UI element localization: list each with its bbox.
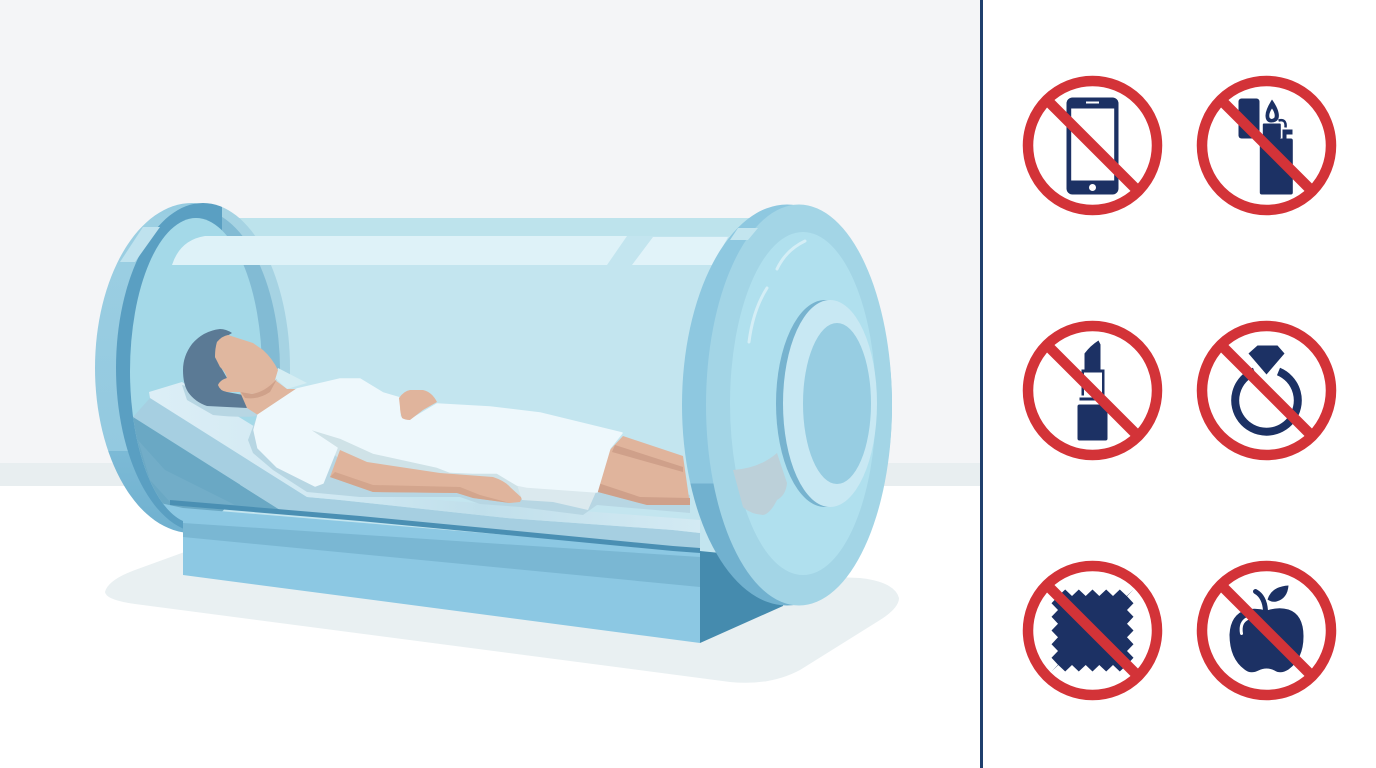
hair — [183, 329, 247, 408]
cap highlight upper — [777, 241, 805, 269]
light strip on left ring — [120, 227, 160, 262]
no sign — [1202, 326, 1331, 455]
divider line — [980, 0, 983, 768]
door shadow — [776, 300, 874, 507]
window highlight right — [632, 237, 728, 265]
prohibited: apple — [1202, 566, 1331, 695]
no sign — [1028, 326, 1157, 455]
gown fold — [307, 428, 522, 498]
base stripe — [183, 523, 700, 587]
rim band reflection — [730, 228, 758, 240]
cap rim — [682, 204, 892, 606]
floor shadow — [105, 550, 899, 683]
phone icon — [1066, 98, 1118, 194]
no sign — [1028, 566, 1157, 695]
wall background — [0, 0, 981, 463]
hyperbaric chamber — [95, 203, 892, 643]
cap face — [706, 204, 892, 606]
gown hem — [517, 485, 596, 510]
no sign — [1202, 81, 1331, 210]
no sign — [1028, 81, 1157, 210]
gown — [254, 379, 622, 492]
feet seen through cap — [733, 453, 787, 515]
base top line — [170, 500, 700, 553]
left ring of chamber — [95, 203, 290, 533]
ring icon — [1235, 346, 1298, 432]
door ring — [783, 300, 877, 507]
cap inner face — [730, 232, 876, 575]
apple icon — [1230, 586, 1304, 672]
legs — [598, 436, 690, 505]
prohibited: ring — [1202, 326, 1331, 455]
leg shadow lower — [598, 483, 690, 505]
arm shadow — [330, 472, 510, 503]
face — [215, 335, 278, 394]
no sign — [1202, 566, 1331, 695]
mattress — [149, 382, 700, 533]
wedge under headrest — [133, 417, 240, 512]
wedge lighter facet — [138, 440, 235, 505]
jaw shadow — [240, 379, 277, 398]
collar — [275, 368, 307, 389]
bed platform — [120, 382, 700, 551]
cap highlight lower — [749, 288, 767, 342]
prohibited: fabric — [1028, 566, 1157, 695]
cylinder body — [200, 218, 770, 560]
hand on belly — [399, 390, 437, 420]
lipstick icon — [1078, 340, 1108, 440]
prohibited: phone — [1028, 81, 1157, 210]
neck — [240, 380, 297, 415]
bed side band — [133, 398, 700, 551]
right end cap — [682, 204, 892, 606]
wedge right part — [215, 469, 280, 510]
window highlight left — [172, 236, 627, 265]
base corner — [163, 504, 183, 521]
leg shadow upper — [612, 445, 683, 472]
arm — [330, 450, 522, 503]
lighter icon — [1238, 98, 1293, 194]
patient — [183, 329, 690, 510]
prohibited: lighter — [1202, 81, 1331, 210]
cylinder top band — [200, 218, 760, 236]
door window — [803, 323, 871, 484]
base front face — [183, 508, 700, 643]
sheet and pillow shadow — [182, 385, 690, 515]
skirting band — [0, 463, 981, 486]
prohibited: lipstick — [1028, 326, 1157, 455]
fabric swatch icon — [1052, 590, 1134, 672]
base side face — [700, 551, 790, 643]
